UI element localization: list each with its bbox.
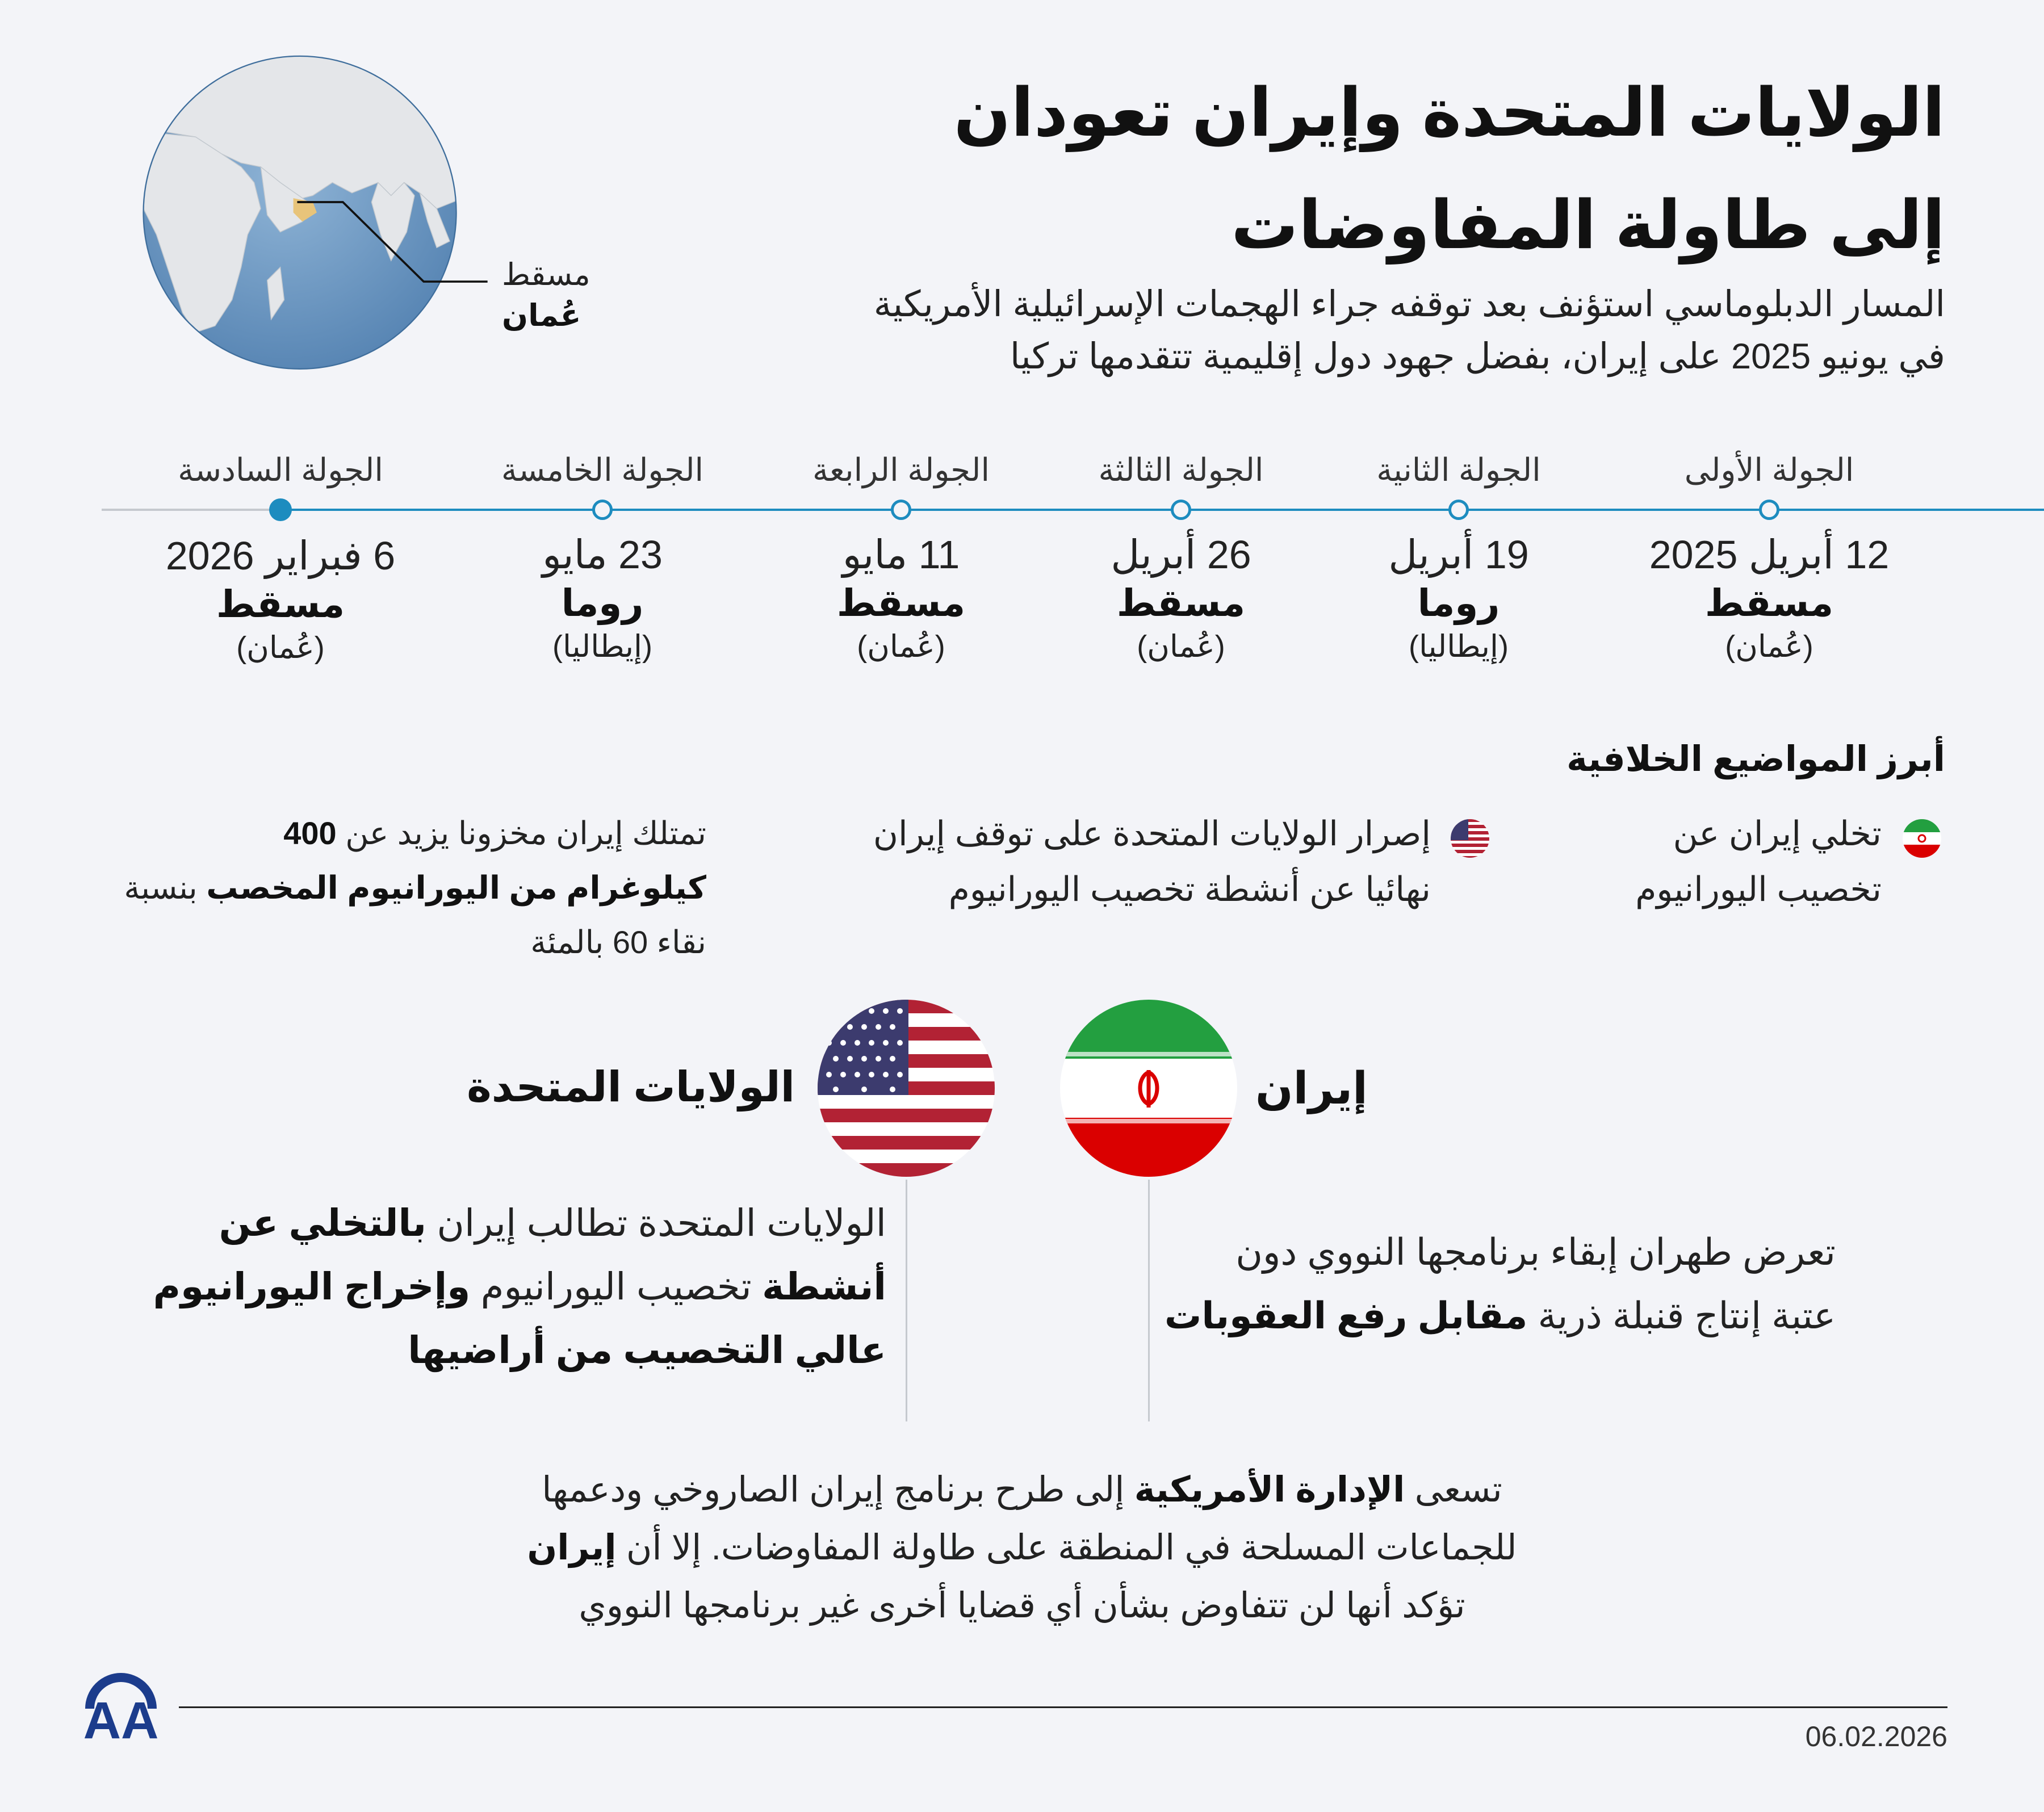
usa text: عالي التخصيب من أراضيها [408, 1329, 886, 1371]
icon: us flag small [1451, 819, 1489, 858]
round 5: (إيطاليا) [552, 630, 652, 664]
round 4: الجولة الرابعة مسقط [812, 452, 990, 624]
round 2: (إيطاليا) [1409, 630, 1509, 664]
timeline rounds [166, 451, 1889, 665]
globe label [502, 258, 590, 333]
usa text: أنشطة تخصيب اليورانيوم وإخراج اليورانيوم [153, 1265, 886, 1307]
bottom note [527, 1468, 1517, 1626]
globe label: مسقط [502, 258, 590, 292]
issue 2: إصرار الولايات المتحدة على توقف إيران [873, 815, 1431, 853]
divider lines [906, 1180, 907, 1421]
title [954, 76, 1945, 265]
bottom note: تؤكد أنها لن تتفاوض بشأن أي قضايا أخرى غير برنامجها النووي [579, 1586, 1465, 1625]
title: إلى طاولة المفاوضات [1231, 188, 1945, 263]
issue 1: تخصيب اليورانيوم [1635, 870, 1882, 908]
globe map [143, 56, 488, 370]
iran text [1165, 1231, 1836, 1337]
globe label: عُمان [502, 299, 581, 333]
bottom note: تسعى الإدارة الأمريكية إلى طرح برنامج إيران الصاروخي ودعمها [542, 1470, 1502, 1509]
usa text: الولايات المتحدة تطالب إيران بالتخلي عن [219, 1202, 886, 1244]
bottom note: للجماعات المسلحة في المنطقة على طاولة المفاوضات. إلا أن إيران [527, 1528, 1517, 1567]
round 3: 26 أبريل [1111, 532, 1251, 577]
subtitle: في يونيو 2025 على إيران، بفضل جهود دول إقليمية تتقدمها تركيا [1010, 337, 1945, 376]
round 1: (عُمان) [1725, 630, 1813, 664]
round 1: 12 أبريل 2025 [1649, 532, 1889, 577]
title: الولايات المتحدة وإيران تعودان [954, 76, 1945, 150]
round 5: الجولة الخامسة روما [501, 452, 703, 624]
footer line [179, 1706, 1947, 1708]
subtitle [874, 282, 1945, 377]
subtitle: المسار الدبلوماسي استؤنف بعد توقفه جراء الهجمات الإسرائيلية الأمريكية [874, 284, 1945, 324]
issue 3: كيلوغرام من اليورانيوم المخصب بنسبة [124, 870, 706, 905]
icon: iran flag [1060, 1000, 1237, 1177]
round 1 [1649, 451, 1889, 664]
issue 2 [873, 815, 1489, 909]
issue 3 [124, 815, 706, 960]
round 4: 11 مايو [843, 532, 960, 577]
section heading: أبرز المواضيع الخلافية [1566, 740, 1945, 779]
issue 2: نهائيا عن أنشطة تخصيب اليورانيوم [949, 870, 1431, 908]
country heading: usa: الولايات المتحدة [467, 1063, 795, 1110]
issue 3: نقاء 60 بالمئة [530, 924, 706, 960]
round 3: (عُمان) [1137, 630, 1225, 664]
issue 3: تمتلك إيران مخزونا يزيد عن 400 [283, 815, 706, 851]
usa text [153, 1202, 886, 1373]
round 6: الجولة السادسة مسقط [178, 452, 383, 625]
round 4: (عُمان) [857, 630, 945, 664]
round 2: الجولة الثانية روما [1376, 452, 1541, 624]
callout line [297, 202, 488, 282]
round 1: الجولة الأولى مسقط [1685, 452, 1854, 624]
iran text: عتبة إنتاج قنبلة ذرية مقابل رفع العقوبات [1165, 1295, 1836, 1336]
issue 1 [1635, 815, 1941, 909]
timeline line [102, 509, 2044, 511]
round 3: الجولة الثالثة مسقط [1099, 452, 1263, 624]
round 6: (عُمان) [236, 631, 325, 665]
country heading: iran: إيران [1255, 1063, 1368, 1113]
icon: iran flag small [1903, 819, 1941, 858]
iran text: تعرض طهران إبقاء برنامجها النووي دون [1235, 1231, 1836, 1273]
round 2: 19 أبريل [1388, 532, 1529, 577]
date: 06.02.2026 [1806, 1721, 1947, 1752]
issue 1: تخلي إيران عن [1673, 815, 1882, 853]
icon: us flag [818, 1000, 995, 1177]
round 6: 6 فبراير 2026 [166, 534, 395, 578]
round 5: 23 مايو [542, 532, 663, 577]
